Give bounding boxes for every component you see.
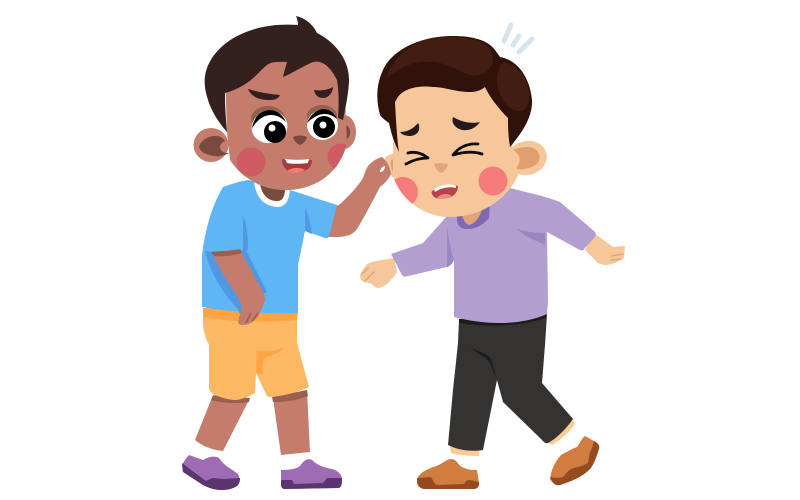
finger lines xyxy=(362,254,623,281)
left arm xyxy=(211,249,265,325)
legs xyxy=(195,390,310,455)
cheeks xyxy=(236,144,354,176)
cheeks xyxy=(394,166,508,204)
left shoe xyxy=(182,455,240,490)
right ear xyxy=(332,115,356,149)
squinting eyes xyxy=(406,144,482,164)
right arm xyxy=(328,157,391,237)
left shoe xyxy=(417,459,479,489)
mouth xyxy=(432,185,458,199)
hand highlight xyxy=(380,166,385,172)
shorts xyxy=(203,308,309,400)
left ear xyxy=(194,128,229,162)
t-shirt xyxy=(202,180,337,313)
eyebrows xyxy=(248,87,333,100)
shorts shading xyxy=(203,308,298,375)
hair xyxy=(377,36,532,152)
illustration: boy pulling another boy's ear xyxy=(182,16,625,490)
nose xyxy=(293,136,307,145)
neck xyxy=(254,180,290,207)
character: boy in blue xyxy=(182,16,391,490)
character: hurt boy in purple xyxy=(360,25,625,489)
socks xyxy=(450,415,575,456)
left ear xyxy=(385,154,400,181)
hands xyxy=(360,233,625,288)
sweater folds xyxy=(447,228,545,267)
trousers xyxy=(448,312,573,451)
head xyxy=(225,50,347,190)
head xyxy=(393,70,518,217)
right shoe xyxy=(550,436,599,485)
neck xyxy=(461,205,483,225)
right shoe xyxy=(281,459,342,489)
sweater xyxy=(391,188,596,323)
right eye xyxy=(307,105,338,140)
nose xyxy=(434,163,448,173)
hair xyxy=(205,16,349,132)
left eye xyxy=(248,106,291,147)
eyebrows xyxy=(400,117,480,136)
impact marks xyxy=(504,25,532,52)
shirt folds xyxy=(205,208,312,316)
right ear xyxy=(503,136,551,180)
collar xyxy=(457,202,490,229)
mouth xyxy=(282,159,312,173)
hair highlights xyxy=(386,37,529,111)
